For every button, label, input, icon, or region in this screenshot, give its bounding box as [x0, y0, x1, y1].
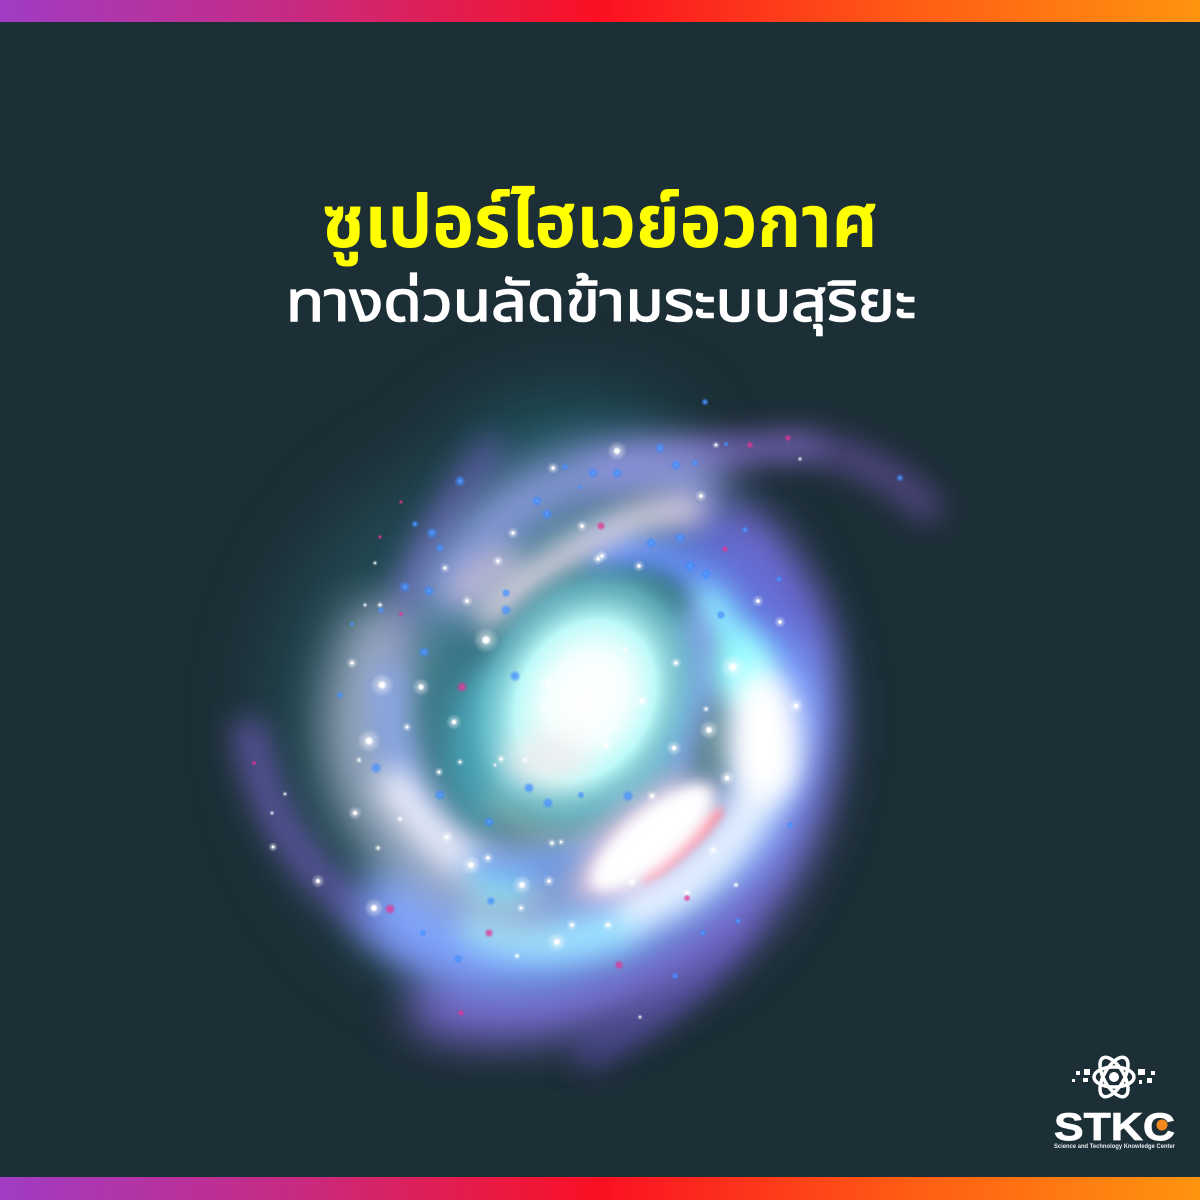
title line 2: white subheading: ทางด่วนลัดข้ามระบบสุริยะ — [286, 270, 916, 335]
inner periwinkle band — [540, 612, 699, 850]
top sweeping purple arm — [600, 446, 930, 510]
lower blue ring — [400, 680, 783, 955]
logo tagline: Science and Technology Knowledge Center — [1054, 1144, 1176, 1150]
pink upper streaks — [460, 510, 690, 615]
white-pink hot streak — [553, 760, 737, 924]
pink halo — [553, 760, 737, 924]
logo wordmark: STKC — [1054, 1106, 1175, 1149]
red edge — [634, 801, 730, 889]
spiral galaxy illustration — [250, 398, 930, 1055]
title line 1: yellow heading: ซูเปอร์ไฮเวย์อวกาศ — [322, 180, 878, 267]
bright galactic core — [409, 511, 761, 889]
blue stars — [336, 398, 904, 980]
inner teal disc — [448, 570, 726, 832]
broad lower purple band — [440, 540, 805, 1011]
bottom gradient bar — [0, 1177, 1200, 1200]
faint outer purple arms — [250, 450, 740, 1055]
star field — [251, 398, 904, 1020]
white core streak — [576, 768, 728, 908]
title — [286, 180, 916, 335]
pink stars — [251, 434, 792, 1017]
lavender upper band — [446, 470, 790, 640]
STKC logo — [1054, 1053, 1176, 1150]
large white stars — [268, 441, 804, 1020]
outer teal glow — [270, 400, 810, 1000]
top gradient bar — [0, 0, 1200, 22]
icon: atom with pixel squares — [1072, 1053, 1155, 1101]
right hot spot — [714, 636, 802, 801]
blue arc upper right — [610, 555, 785, 710]
inner disc fill — [370, 505, 750, 950]
logo orange dot — [1156, 1120, 1168, 1130]
left bright arm — [362, 640, 525, 890]
